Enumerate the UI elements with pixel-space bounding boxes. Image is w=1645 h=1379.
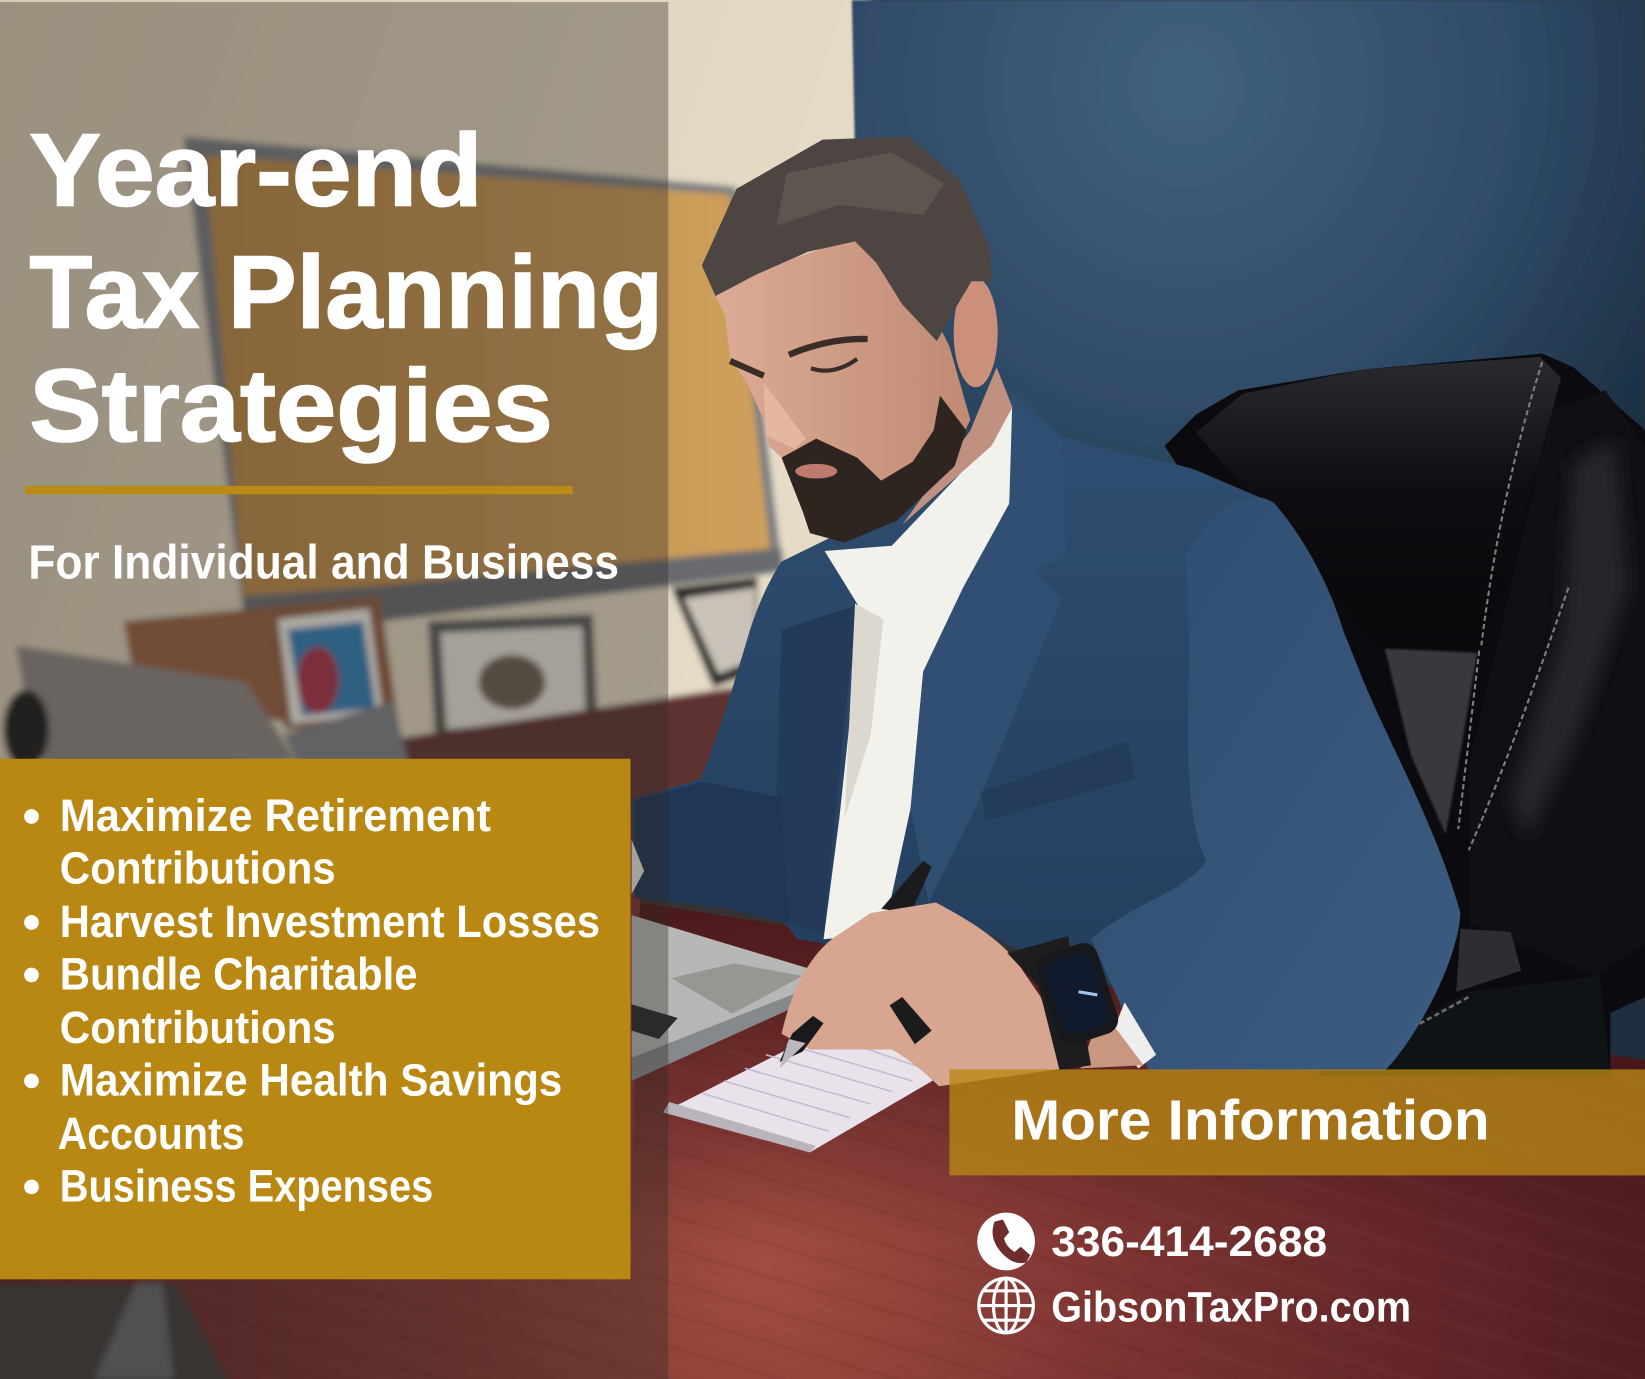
chair: [1165, 354, 1645, 1076]
shirt: [824, 404, 1014, 939]
pocket: [981, 741, 1135, 821]
title: Tax Planning: [29, 234, 663, 349]
desk surface: [0, 766, 1645, 1379]
bullet: charitable: [24, 949, 418, 1053]
banner: more information: More Information: [1011, 1090, 1490, 1153]
shirt cuff: [1112, 1002, 1156, 1068]
hand: [782, 903, 1065, 1086]
cream wall: [0, 0, 871, 829]
ring: [890, 997, 932, 1044]
chair middle cushion: [1385, 649, 1477, 834]
watch: [1007, 936, 1122, 1070]
forearm sleeve: [1091, 497, 1460, 1070]
beard: [782, 396, 966, 543]
title: Strategies: [29, 348, 553, 463]
mouse: [3, 690, 49, 769]
desk top shading: [629, 903, 1645, 1259]
shirt cuff left: [632, 840, 644, 894]
chair lower highlight: [1456, 929, 1521, 992]
bullet: health savings: Maximize Health Savings: [60, 1055, 562, 1106]
bullet: retirement: [24, 790, 491, 894]
hair highlight: [776, 152, 944, 226]
laptop base: [632, 915, 816, 1081]
chair side wing: [1469, 390, 1645, 976]
contact: phone: [977, 1213, 1327, 1270]
lapel: [911, 399, 1066, 903]
face: [714, 239, 970, 537]
blue wall: [852, 0, 1645, 1081]
bullet: charitable: Bundle Charitable: [60, 949, 418, 1000]
wrist: [1081, 1023, 1144, 1068]
eyes: [730, 339, 868, 376]
contact: website: [979, 1278, 1411, 1333]
bullet: health savings: Accounts: [58, 1108, 244, 1159]
left sleeve shadow: [635, 782, 789, 924]
banner: more information: [949, 1069, 1645, 1175]
bullet: business expenses: Business Expenses: [60, 1161, 433, 1212]
hair: [702, 136, 992, 341]
nose highlight: [764, 383, 806, 449]
ear: [954, 278, 998, 387]
neck: [902, 367, 1012, 525]
laptop lid: [16, 645, 296, 777]
stitching: [1458, 362, 1568, 850]
keys: [632, 1004, 678, 1039]
back desk: [388, 687, 755, 829]
picture frame: family photo: [428, 614, 598, 747]
icon: phone: [977, 1213, 1035, 1270]
picture frame: blue photo: [271, 596, 399, 729]
bullet: health savings: [24, 1055, 562, 1159]
title divider: [25, 486, 573, 494]
pen: [779, 1016, 824, 1062]
plaque: [124, 607, 296, 724]
upper pen: [881, 861, 932, 913]
jacket dark inner: [776, 603, 862, 934]
title: [29, 113, 663, 463]
contact: phone: 336-414-2688: [1051, 1218, 1327, 1266]
jacket: [632, 394, 1460, 1070]
desk grain: [0, 1049, 1645, 1379]
chair back cushion: [1196, 357, 1561, 649]
panel: strategies list: [0, 759, 631, 1279]
bullet: harvest losses: Harvest Investment Losses: [60, 896, 600, 947]
lower left blur: [0, 1282, 231, 1379]
lips: [795, 464, 837, 479]
notepad: [663, 1016, 936, 1152]
corkboard: [184, 136, 782, 614]
icon: globe: [979, 1278, 1033, 1333]
bullet: retirement: Contributions: [60, 843, 336, 894]
grey box: [283, 701, 409, 766]
trackpad sticker: [671, 963, 803, 1014]
wing highlight: [1511, 441, 1628, 840]
title: Year-end: [29, 113, 483, 228]
chair arm: [1317, 976, 1610, 1076]
man: [632, 136, 1460, 1086]
contact: website: GibsonTaxPro.com: [1051, 1283, 1411, 1331]
laptop edge: [632, 992, 810, 1081]
shelf rail: [243, 548, 785, 630]
shirt shadow: [845, 603, 883, 819]
picture frame: right photo: [671, 577, 757, 687]
left translucent panel: [0, 2, 668, 1379]
bullet: retirement: Maximize Retirement: [60, 790, 491, 841]
bullet: charitable: Contributions: [60, 1002, 336, 1053]
subtitle: For Individual and Business: [28, 535, 619, 589]
